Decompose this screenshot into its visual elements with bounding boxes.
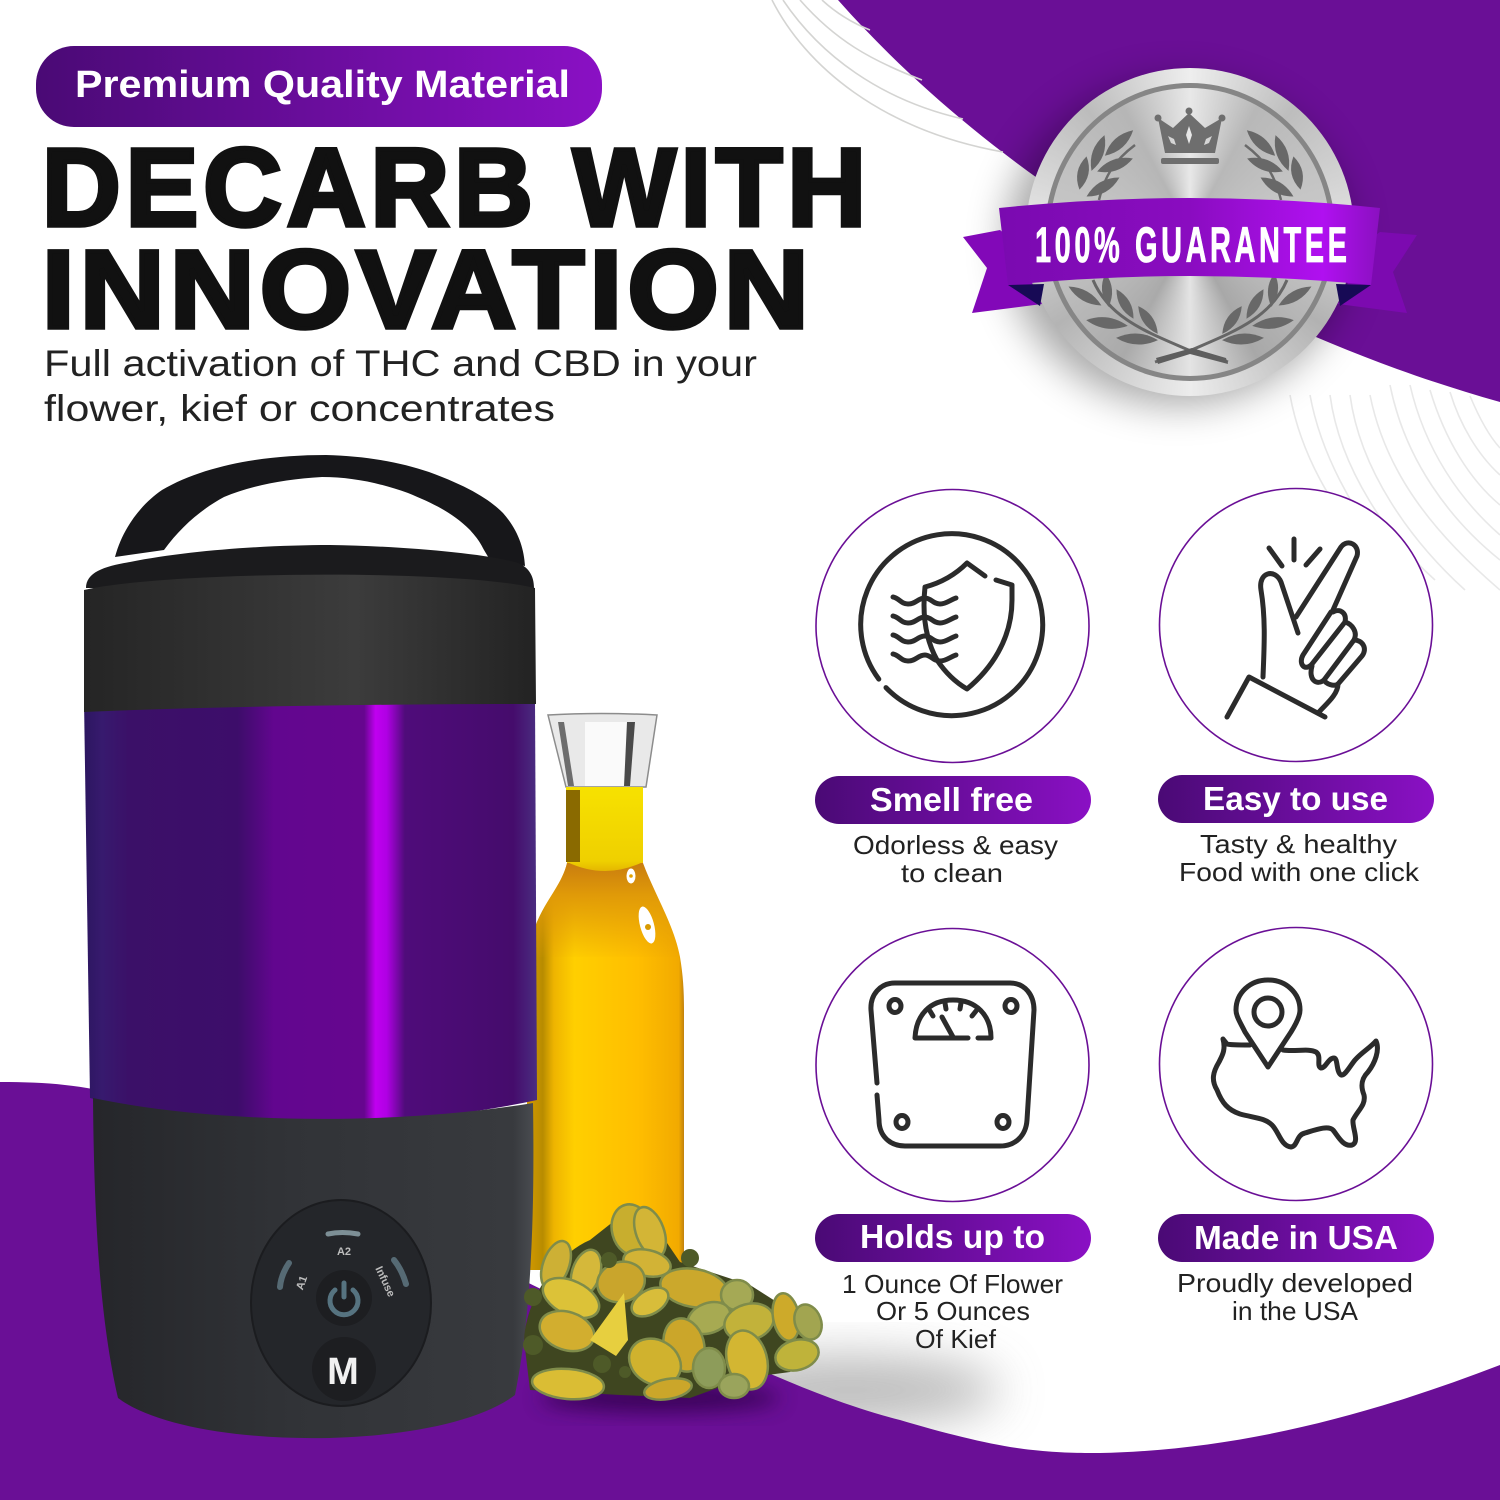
pill: premium quality material: Premium Quality Material	[75, 64, 570, 106]
shadow below buds on purple	[540, 1384, 780, 1412]
bottom shadow	[700, 1356, 1000, 1424]
icon: weighing scale	[871, 983, 1034, 1146]
feature: smell free	[815, 490, 1091, 888]
feature: easy to use	[1158, 488, 1434, 887]
description: Odorless & easy	[853, 830, 1058, 860]
guarantee badge	[963, 62, 1417, 428]
description	[1179, 829, 1420, 887]
description: to clean	[901, 858, 1003, 888]
subtitle: Full activation of THC and CBD in your	[44, 343, 757, 384]
icon circle	[1160, 928, 1432, 1200]
ribbon band	[999, 198, 1380, 285]
feature: easy to use: Easy to use	[1203, 780, 1388, 817]
feature: smell free: Smell free	[870, 781, 1033, 818]
feature: holds up to: Holds up to	[860, 1218, 1045, 1255]
top right purple wave	[838, 0, 1500, 402]
ribbon tails	[963, 230, 1042, 313]
description: Of Kief	[915, 1324, 997, 1354]
icon: shield with odor waves	[861, 534, 1043, 716]
icon circle	[1160, 488, 1432, 762]
ribbon text: 100% GUARANTEE	[1035, 217, 1347, 273]
description: Proudly developed	[1177, 1268, 1413, 1298]
wreath	[1066, 126, 1314, 364]
feature: holds up to	[815, 928, 1091, 1354]
subtitle: flower, kief or concentrates	[44, 388, 555, 429]
lid	[86, 545, 534, 588]
pill label	[1158, 775, 1434, 823]
description: Or 5 Ounces	[876, 1296, 1030, 1326]
description	[1177, 1268, 1413, 1326]
description: in the USA	[1232, 1296, 1359, 1326]
description	[842, 1269, 1063, 1354]
control panel: A1	[294, 1274, 310, 1292]
icon: usa map with pin	[1213, 980, 1377, 1147]
control panel: A2	[337, 1246, 351, 1258]
description	[853, 830, 1058, 888]
bud pile shadow base	[524, 1210, 815, 1398]
crown	[1154, 108, 1226, 164]
product: decarb machine	[84, 455, 537, 1438]
pill label	[815, 1214, 1091, 1262]
stainless purple body	[84, 700, 537, 1122]
handle	[115, 455, 525, 566]
control panel: M	[327, 1351, 359, 1393]
icon circle	[816, 490, 1089, 762]
icon: snapping fingers hand	[1227, 539, 1364, 717]
buttons	[328, 1232, 358, 1234]
pill label	[1158, 1214, 1434, 1262]
control panel	[251, 1200, 431, 1406]
description: Food with one click	[1179, 857, 1420, 887]
icon circle	[816, 928, 1089, 1202]
feature: made in usa	[1158, 928, 1434, 1326]
dried flower buds	[523, 1200, 826, 1403]
feature: made in usa: Made in USA	[1194, 1219, 1398, 1256]
subtitle	[44, 343, 757, 429]
pill label	[815, 776, 1091, 824]
control panel: Infuse	[372, 1265, 397, 1299]
title	[42, 126, 871, 352]
bottom sleeve	[93, 1098, 533, 1438]
oil bottle	[527, 714, 684, 1270]
description: 1 Ounce Of Flower	[842, 1269, 1063, 1299]
silver medal	[1026, 68, 1354, 396]
title: INNOVATION	[42, 228, 814, 352]
title: DECARB WITH	[42, 126, 871, 250]
description: Tasty & healthy	[1200, 829, 1397, 859]
bottom purple wave	[0, 1082, 1500, 1500]
pill: premium quality material	[36, 46, 602, 127]
